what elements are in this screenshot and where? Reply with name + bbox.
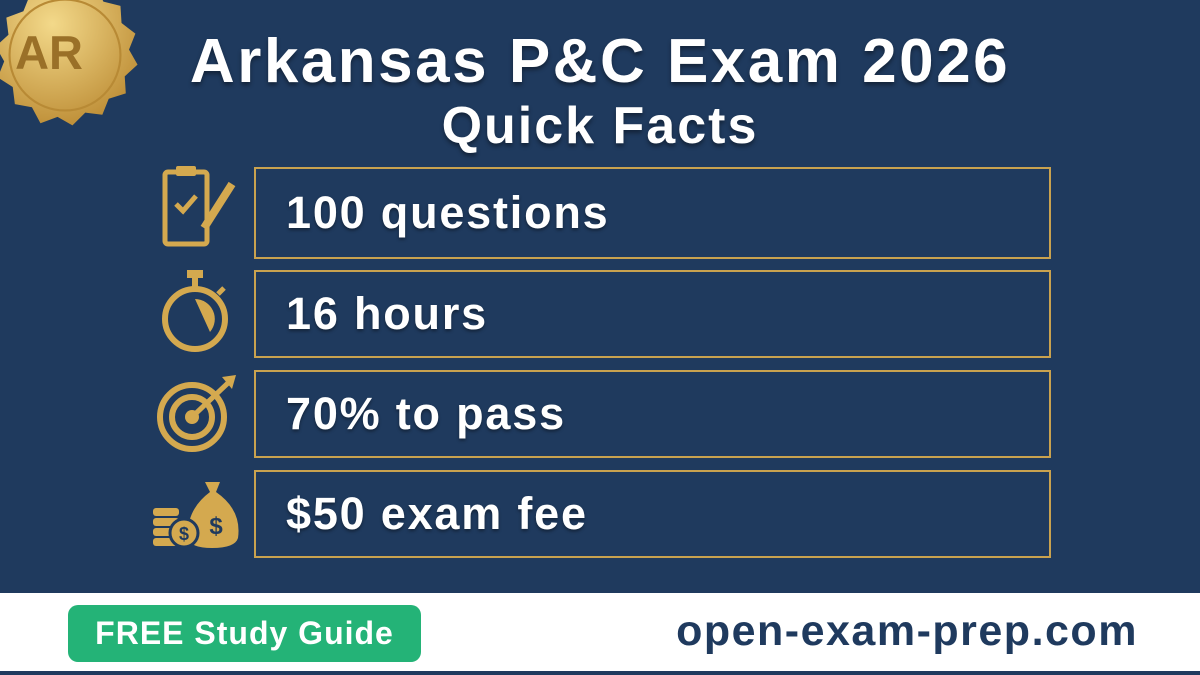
button: free study guide: FREE Study Guide — [95, 615, 394, 651]
icon: clipboard — [162, 166, 236, 246]
fact: hours — [254, 270, 1051, 358]
icon: money — [153, 482, 239, 548]
icon: money: $ — [179, 524, 189, 544]
fact: fee: $50 exam fee — [286, 488, 588, 539]
badge: AR seal — [0, 0, 138, 126]
fact: questions: 100 questions — [286, 187, 610, 238]
fact: pass: 70% to pass — [286, 388, 566, 439]
button: free study guide — [68, 605, 421, 662]
fact: hours: 16 hours — [286, 288, 488, 339]
fact: fee — [254, 470, 1051, 558]
badge: AR seal: AR — [15, 27, 83, 79]
fact: questions — [254, 167, 1051, 259]
subtitle: Quick Facts — [442, 97, 758, 155]
url: open-exam-prep.com — [676, 607, 1138, 655]
fact: pass — [254, 370, 1051, 458]
title: Arkansas P&C Exam 2026 — [190, 27, 1010, 96]
footer band — [0, 593, 1200, 671]
icon: money: $ — [209, 513, 223, 540]
icon: stopwatch — [162, 270, 228, 352]
icon: target — [157, 375, 236, 452]
